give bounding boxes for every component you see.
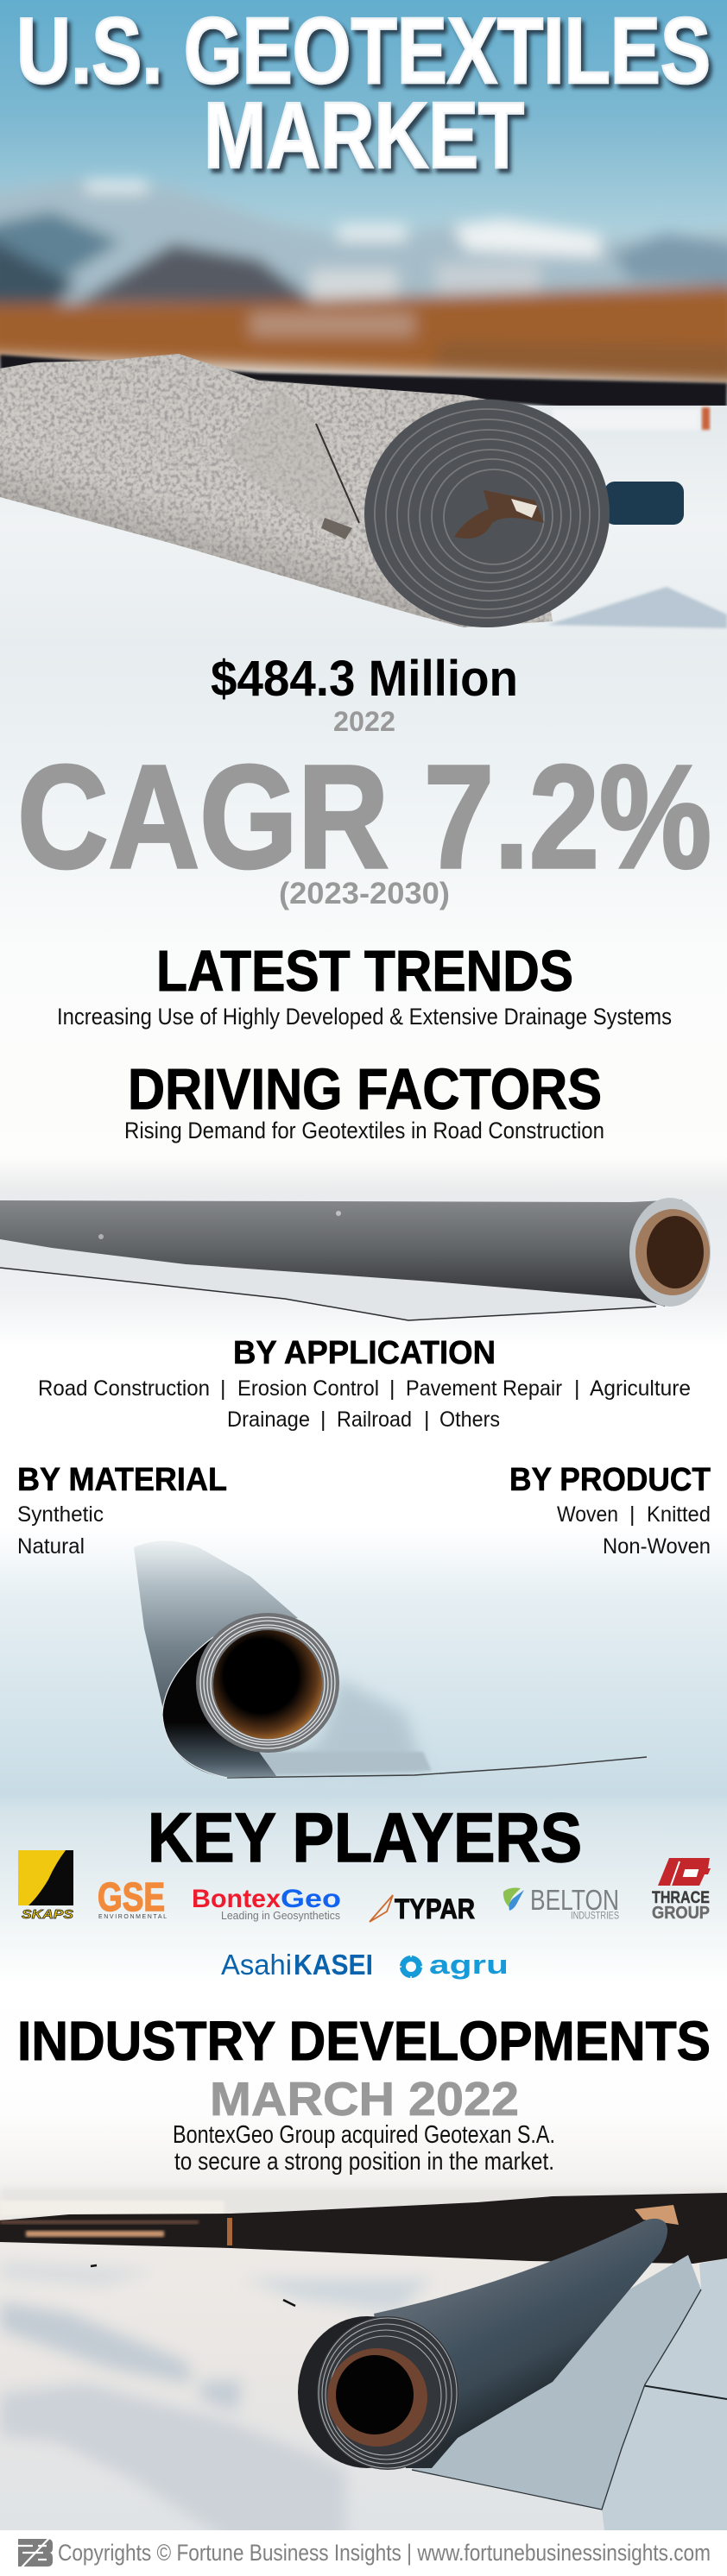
- logo: Thrace Group: [652, 1858, 711, 1923]
- base year: 2022: [333, 706, 395, 737]
- product list: Non-Woven: [603, 1534, 711, 1559]
- date: MARCH 2022: [210, 2072, 519, 2126]
- by application: BY APPLICATION: [233, 1335, 496, 1371]
- by material: BY MATERIAL: [17, 1462, 227, 1498]
- logo: GSE: GSE: [98, 1874, 165, 1919]
- roll end with rings: [364, 400, 610, 627]
- logo: agru: [398, 1949, 509, 1980]
- hero photo: geotextile roll: [0, 0, 727, 639]
- application list: |: [574, 1376, 580, 1401]
- application list: Erosion Control: [237, 1376, 379, 1401]
- material list: Natural: [17, 1534, 85, 1559]
- photo: upright roll: [134, 1541, 647, 1778]
- footer logo: [18, 2538, 53, 2567]
- product list: [557, 1502, 711, 1559]
- latest trends: LATEST TRENDS: [156, 939, 573, 1004]
- logo: BontexGeo: Leading in Geosynthetics: [221, 1909, 340, 1922]
- driving factors: DRIVING FACTORS: [128, 1057, 602, 1122]
- logo: Belton Industries: [503, 1884, 619, 1921]
- application list: Pavement Repair: [406, 1376, 562, 1401]
- application list: Agriculture: [590, 1376, 691, 1401]
- logo: Belton Industries: BELTON: [530, 1884, 619, 1916]
- market size: $484.3 Million: [211, 651, 518, 707]
- title: MARKET: [204, 83, 524, 188]
- sheet edge line: [227, 1757, 647, 1778]
- logo: BontexGeo: Bontex: [192, 1885, 281, 1913]
- logo: SKAPS: SKAPS: [22, 1907, 73, 1922]
- by product: BY PRODUCT: [509, 1462, 711, 1498]
- logo: Thrace Group: THRACE: [652, 1889, 710, 1907]
- development description: to secure a strong position in the market.: [174, 2148, 554, 2176]
- roll body shading: [0, 458, 553, 627]
- logo: Thrace Group: GROUP: [652, 1904, 710, 1923]
- by application: [38, 1335, 691, 1432]
- application list: |: [424, 1408, 430, 1432]
- roll body: [134, 1541, 298, 1713]
- white sheet folds: [0, 2261, 432, 2541]
- roll body: [0, 354, 553, 627]
- development description: BontexGeo Group acquired Geotexan S.A.: [173, 2121, 555, 2149]
- ground: [0, 406, 727, 551]
- roll fold flap: [223, 387, 357, 526]
- latest trends: [57, 939, 672, 1030]
- shadow under roll: [547, 587, 727, 628]
- logo: BontexGeo: [192, 1885, 341, 1922]
- application list: Others: [439, 1408, 500, 1432]
- black crescent: [162, 1637, 276, 1778]
- key players heading: KEY PLAYERS: [148, 1799, 582, 1877]
- material list: Synthetic: [17, 1502, 104, 1527]
- application list: Road Construction: [38, 1376, 210, 1401]
- application list: |: [389, 1376, 395, 1401]
- photo: grey roll: [0, 1198, 711, 1320]
- background rolls: [0, 2193, 727, 2264]
- material list: [17, 1502, 104, 1559]
- logos: [18, 1850, 711, 1981]
- application list: |: [220, 1376, 226, 1401]
- application list: [38, 1376, 691, 1432]
- logo: Asahi Kasei: Asahi: [221, 1949, 292, 1981]
- sheet under roll: [412, 2255, 701, 2510]
- product list: Woven: [557, 1502, 618, 1527]
- footer band: [0, 2530, 727, 2576]
- photo: black roll on white sheet: [0, 2188, 727, 2541]
- logo: Asahi Kasei: [221, 1949, 373, 1981]
- logo: Belton Industries: INDUSTRIES: [571, 1909, 619, 1921]
- logo: SKAPS: [18, 1850, 73, 1922]
- title: [16, 0, 711, 188]
- logo: Asahi Kasei: KASEI: [294, 1949, 373, 1981]
- development description: [173, 2121, 555, 2176]
- product list: Knitted: [647, 1502, 711, 1527]
- factor description: Rising Demand for Geotextiles in Road Construction: [124, 1118, 604, 1143]
- forecast period: (2023-2030): [279, 877, 450, 910]
- logo: TYPAR: TYPAR: [395, 1893, 475, 1924]
- application list: Drainage: [227, 1408, 310, 1432]
- by product: [509, 1462, 711, 1559]
- rings: [196, 1613, 339, 1753]
- dark object: [604, 482, 684, 525]
- application list: Railroad: [337, 1408, 412, 1432]
- logo: TYPAR: [370, 1893, 475, 1924]
- market size: [211, 651, 518, 737]
- product list: |: [629, 1502, 635, 1527]
- driving factors: [124, 1057, 604, 1143]
- application list: |: [320, 1408, 326, 1432]
- lower right sheet: [602, 2258, 727, 2530]
- roll end: [298, 2316, 458, 2470]
- by material: [17, 1462, 227, 1559]
- logo: BontexGeo: Geo: [281, 1885, 341, 1913]
- logo: agru: agru: [429, 1949, 509, 1980]
- logo: GSE: ENVIRONMENTAL: [98, 1914, 167, 1920]
- roll body: [374, 2219, 667, 2468]
